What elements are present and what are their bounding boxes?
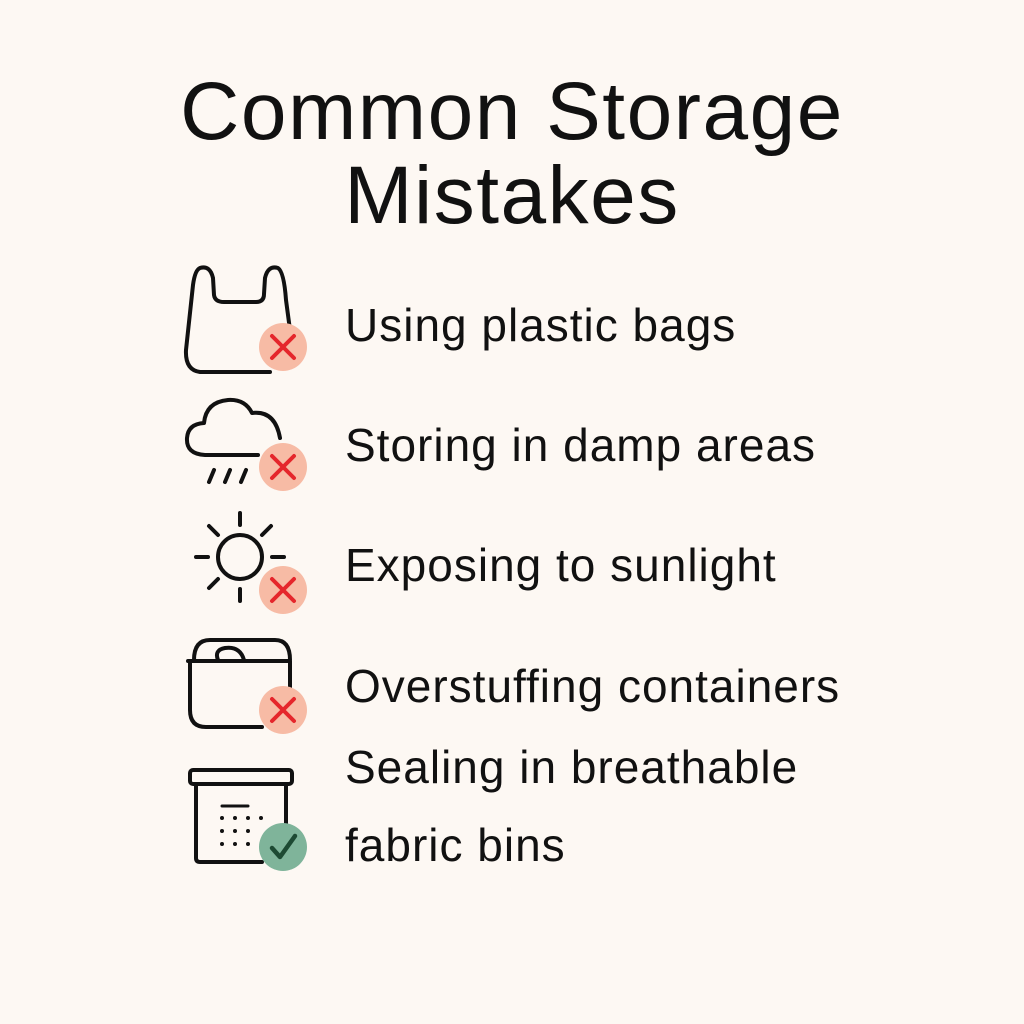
icon: fabric bin [190,770,307,871]
badge x [259,686,307,734]
label: overstuffing: Overstuffing containers [345,660,840,712]
label: fabric bins: Sealing in breathable [345,741,798,793]
label: fabric bins: fabric bins [345,819,566,871]
badge x [259,323,307,371]
badge check [259,823,307,871]
icon: sun [196,513,307,614]
badge x [259,566,307,614]
icon: overstuffed container [188,640,307,734]
label: fabric bins [345,741,798,871]
title [180,66,844,241]
label: damp areas: Storing in damp areas [345,419,816,471]
icon: rain cloud [187,400,307,491]
label: sunlight: Exposing to sunlight [345,539,777,591]
title: Common Storage [180,66,844,157]
badge x [259,443,307,491]
title: Mistakes [344,150,680,241]
icon: plastic bag [186,267,307,372]
label: plastic bags: Using plastic bags [345,299,736,351]
